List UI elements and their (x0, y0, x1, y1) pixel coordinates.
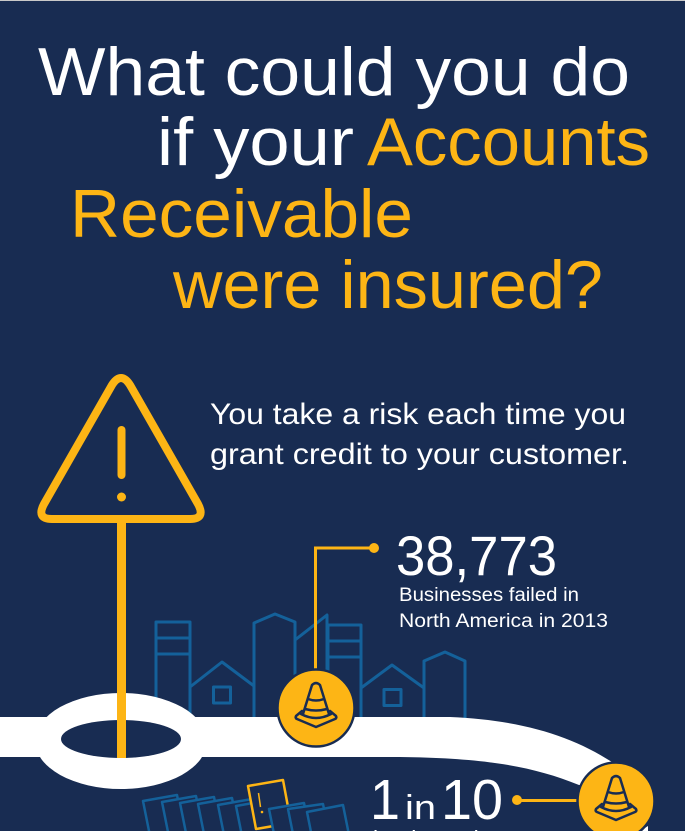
intro text: You take a risk each time you (210, 398, 626, 431)
statistic: 1 in 10: 10 (441, 768, 503, 831)
title: were insured? (172, 247, 603, 323)
statistic: 1 in 10: 1 (370, 768, 400, 831)
title: if your (157, 104, 354, 180)
connector to 1 in 10 (512, 795, 580, 805)
domino cards (143, 780, 354, 831)
warning sign (41, 378, 201, 758)
intro text (210, 398, 629, 471)
title (38, 34, 650, 323)
road (0, 717, 648, 831)
roundabout (35, 693, 207, 789)
statistic: 38,773: 38,773 (396, 524, 557, 587)
city skyline (156, 614, 465, 720)
statistic: 1 in 10: in (405, 789, 436, 827)
orange warning card (248, 780, 291, 829)
icon: traffic cone badge (278, 670, 354, 746)
intro text: grant credit to your customer. (210, 438, 629, 471)
icon: traffic cone badge 2 (578, 762, 654, 831)
statistic: 38,773: Businesses failed in (399, 585, 579, 606)
title: Receivable (70, 176, 413, 252)
statistic: 1 in 10 (370, 768, 503, 831)
connector to 38,773 (316, 543, 379, 672)
title: What could you do (38, 34, 630, 110)
statistic: 38,773: North America in 2013 (399, 611, 608, 632)
statistic: 38,773 (396, 524, 608, 632)
title: Accounts (367, 104, 650, 180)
